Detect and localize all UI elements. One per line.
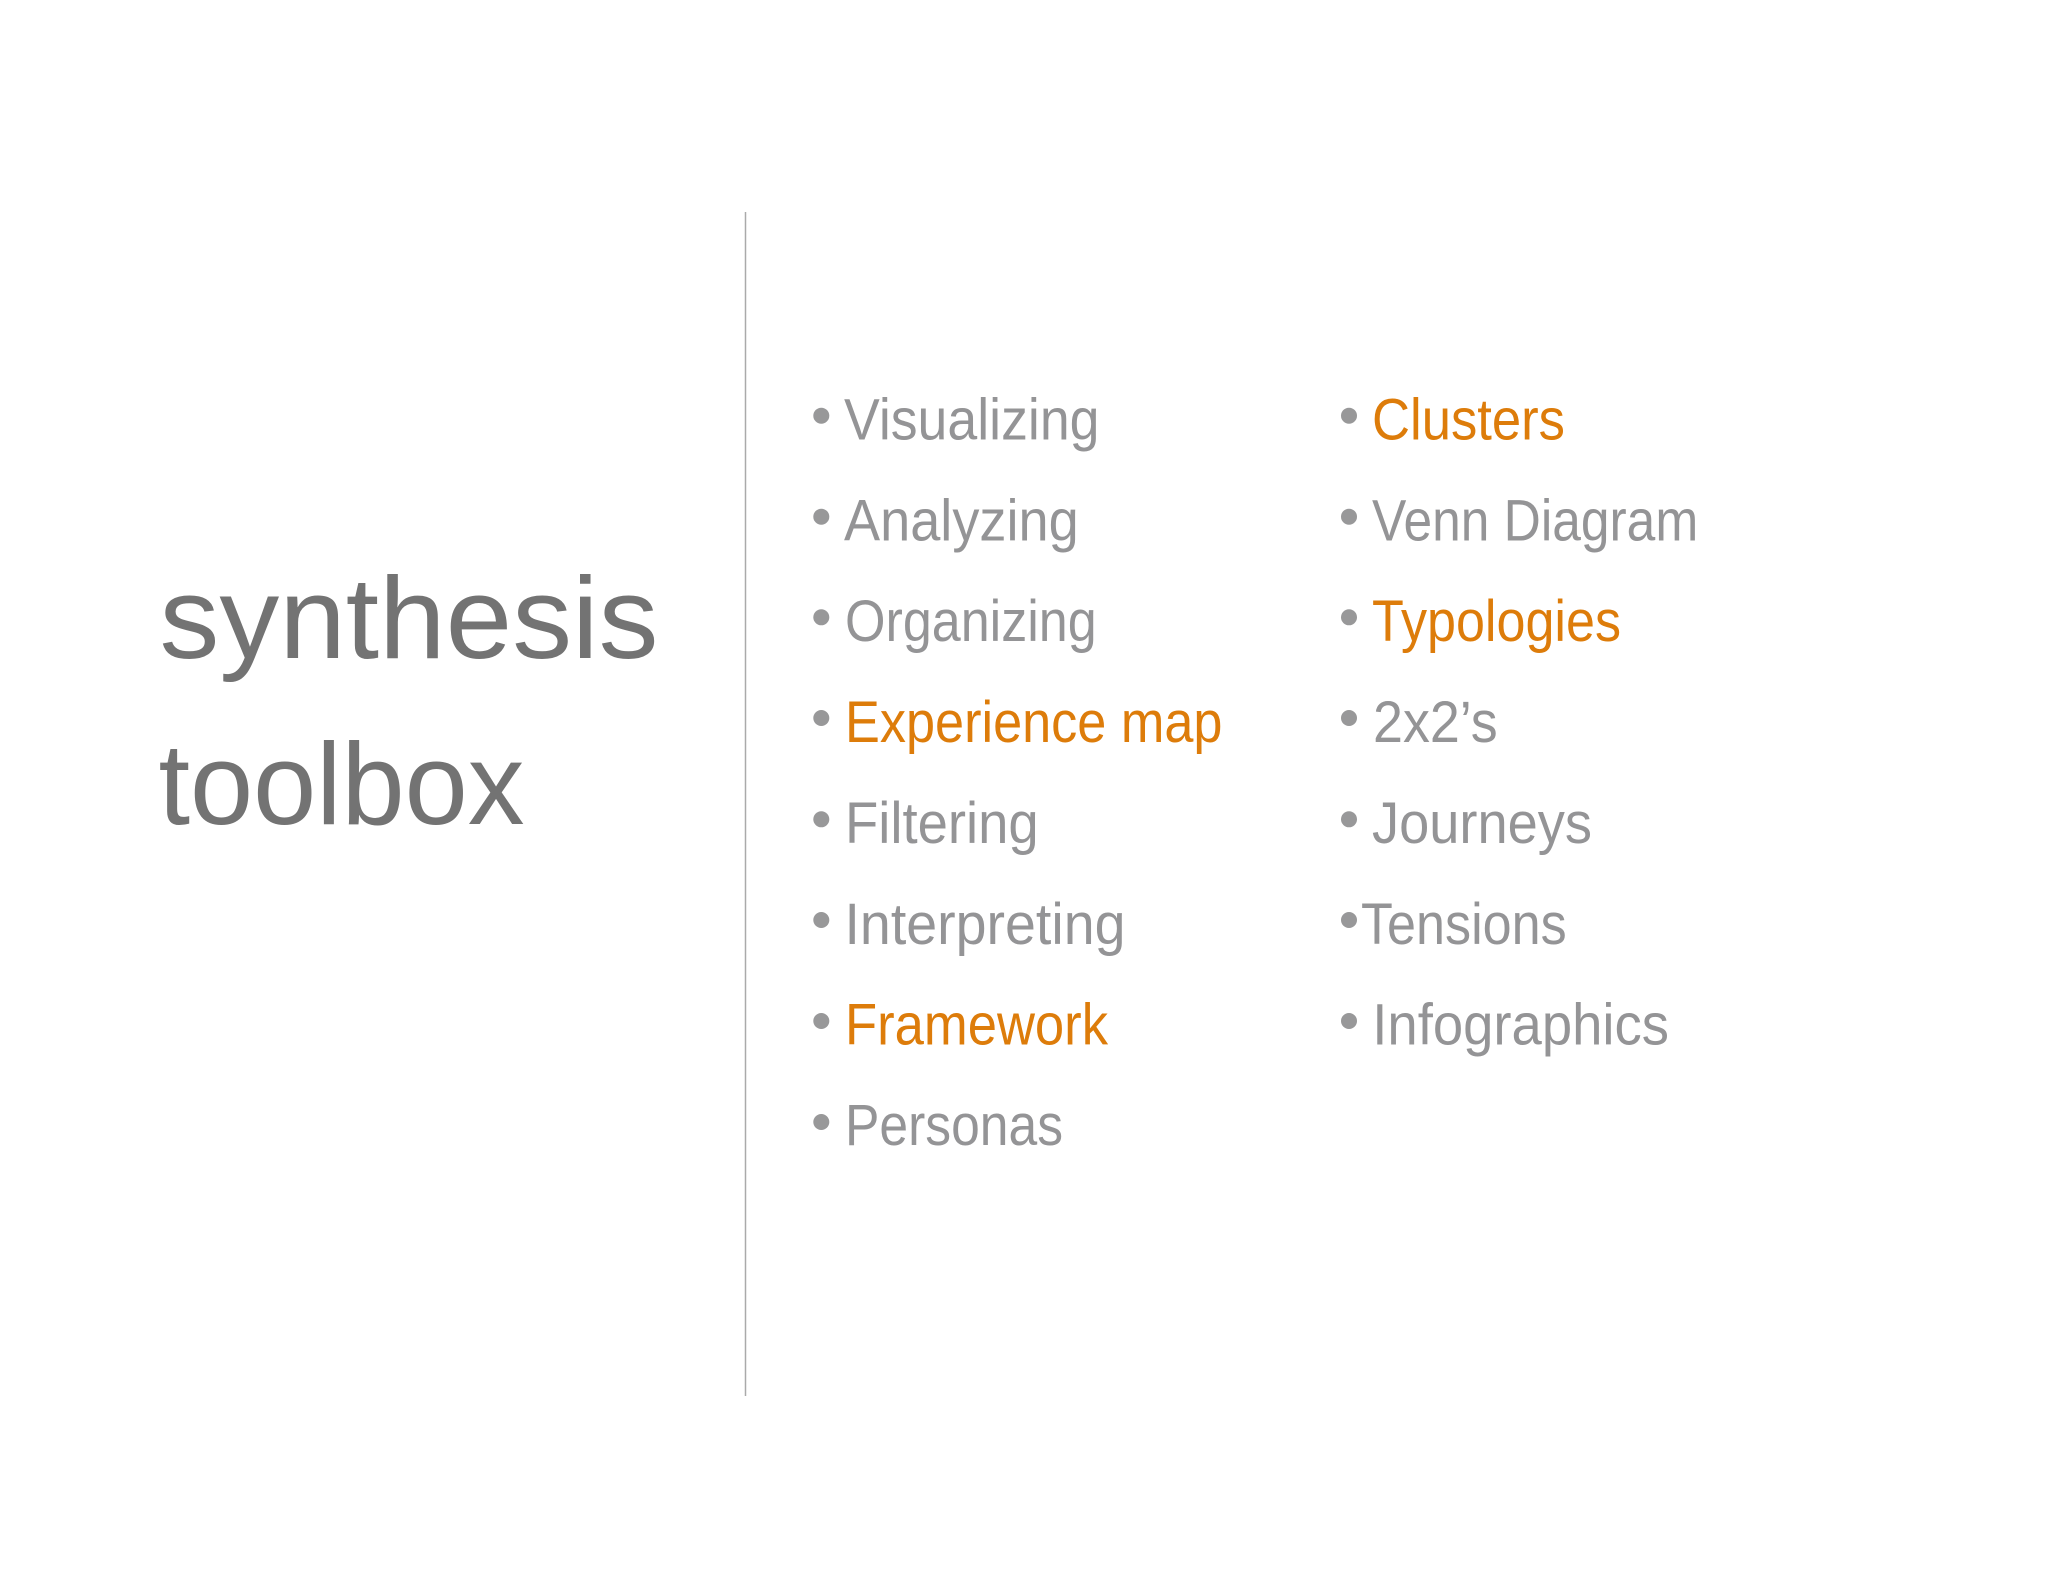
list item: Experience map (highlighted): Experience map	[845, 690, 1222, 755]
list item: Organizing: Organizing	[845, 589, 1097, 654]
title: synthesis toolbox: toolbox	[158, 719, 524, 849]
list item: Venn Diagram: Venn Diagram	[1372, 488, 1698, 554]
list item: Framework (highlighted): Framework	[845, 992, 1109, 1058]
list item: 2x2's: 2x2’s	[1373, 690, 1498, 755]
list item: Journeys: Journeys	[1372, 791, 1592, 856]
list item: Personas: Personas	[845, 1093, 1063, 1158]
list item: Typologies (highlighted): Typologies	[1372, 589, 1621, 654]
list item: Infographics: Infographics	[1372, 992, 1669, 1058]
list item: Visualizing: Visualizing	[844, 388, 1100, 452]
list item: Clusters (highlighted): Clusters	[1372, 388, 1565, 452]
list item: Interpreting: Interpreting	[844, 892, 1126, 957]
list item: Analyzing: Analyzing	[844, 488, 1079, 554]
list item: Filtering: Filtering	[845, 791, 1039, 856]
list item: Tensions: Tensions	[1361, 892, 1567, 957]
title: synthesis toolbox	[158, 553, 658, 849]
title: synthesis toolbox: synthesis	[160, 553, 658, 683]
panel: left column list	[813, 388, 1222, 1158]
panel: right column list	[1341, 388, 1698, 1058]
